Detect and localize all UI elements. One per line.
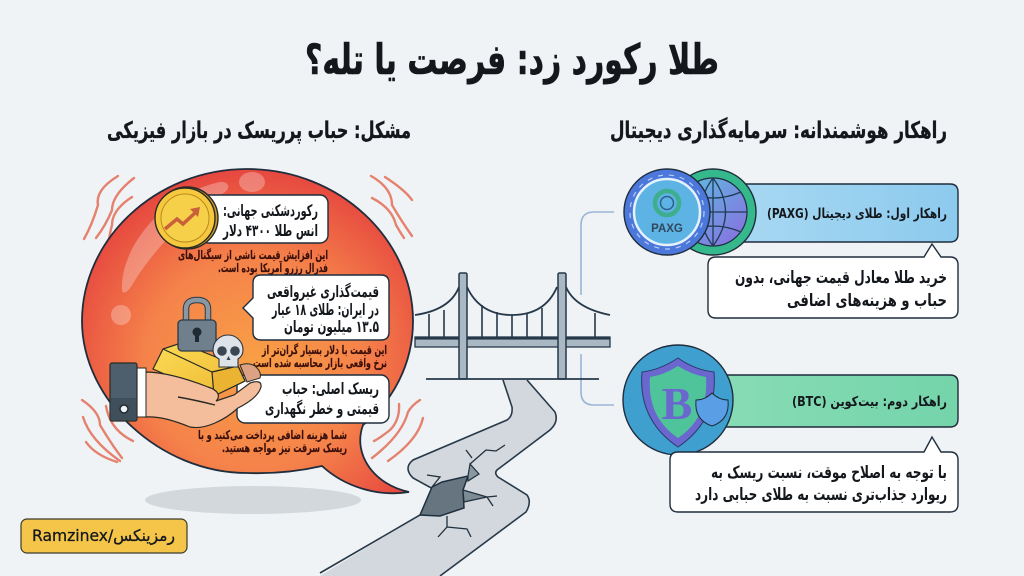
box: record: انس طلا ۴۳۰۰ دلار xyxy=(222,221,318,240)
box: iran pricing xyxy=(243,275,389,340)
band: BTC title: راهکار دوم: بیت‌کوین (BTC) xyxy=(792,394,947,410)
band: PAXG title: راهکار اول: طلای دیجیتال (PAXG) xyxy=(767,206,947,222)
box: record xyxy=(200,195,328,243)
title: طلا رکورد زد: فرصت یا تله؟ xyxy=(305,35,719,85)
connector lines xyxy=(581,212,614,405)
icon: globe xyxy=(670,169,756,255)
note: dollar price: این قیمت با دلار بسیار گران‌تر از xyxy=(261,343,387,357)
road with crack xyxy=(320,380,556,576)
bubble shadow xyxy=(145,486,361,514)
vibration waves xyxy=(82,176,423,462)
note: extra cost: شما هزینه اضافی پرداخت می‌کنید و با xyxy=(198,428,347,443)
note: fed: این افزایش قیمت ناشی از سیگنال‌های xyxy=(178,248,328,262)
band: PAXG title xyxy=(735,184,958,242)
brand badge: Ramzinex/رمزینکس xyxy=(32,526,175,546)
icon: bitcoin shield: B xyxy=(662,378,692,429)
bridge xyxy=(415,273,610,379)
band: BTC title xyxy=(715,375,958,427)
icon: hand holding gold, lock and skull xyxy=(110,300,261,428)
box: iran pricing: در ایران: طلای ۱۸ عیار xyxy=(271,300,379,319)
icon: bitcoin shield xyxy=(623,345,733,455)
icon: PAXG coin xyxy=(624,169,710,255)
box: PAXG description xyxy=(708,244,958,318)
box: main risk xyxy=(237,375,389,423)
note: dollar price xyxy=(253,343,387,371)
bubble highlights xyxy=(111,172,265,325)
note: fed: فدرال رزرو آمریکا بوده است. xyxy=(218,260,328,276)
brand badge xyxy=(21,519,187,553)
note: fed xyxy=(178,248,328,276)
panel: PAXG solution xyxy=(624,169,958,318)
box: PAXG description: حباب و هزینه‌های اضافی xyxy=(787,291,947,311)
box: main risk: ریسک اصلی: حباب xyxy=(282,379,379,398)
box: PAXG description: خرید طلا معادل قیمت جهانی، بدون xyxy=(735,268,947,288)
box: BTC description xyxy=(670,437,958,512)
icon: PAXG coin: PAXG xyxy=(651,223,683,235)
box: iran pricing: قیمت‌گذاری غیرواقعی xyxy=(267,282,379,301)
box: main risk: قیمتی و خطر نگهداری xyxy=(265,399,379,418)
note: dollar price: نرخ واقعی بازار محاسبه شده است xyxy=(253,356,387,371)
note: extra cost: ریسک سرقت نیز مواجه هستید. xyxy=(222,441,347,456)
box: record: رکوردشکنی جهانی: xyxy=(223,201,318,220)
note: extra cost xyxy=(198,428,347,456)
red speech bubble xyxy=(82,169,413,493)
box: iran pricing: ۱۳.۵ میلیون تومان xyxy=(284,317,379,336)
panel: BTC solution xyxy=(623,345,958,512)
heading: problem: مشکل: حباب پرریسک در بازار فیزیکی xyxy=(107,118,411,144)
icon: gold coin xyxy=(155,187,218,249)
